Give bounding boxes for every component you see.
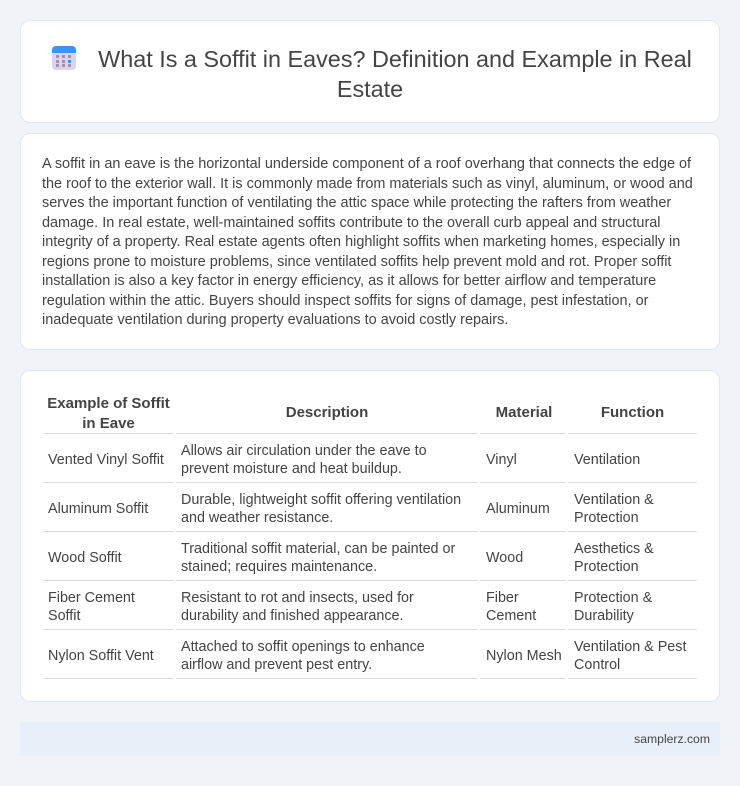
text block: definition paragraph bbox=[42, 156, 693, 328]
row: Vented Vinyl Soffit: Ventilation bbox=[574, 452, 640, 468]
row: Nylon Soffit Vent bbox=[48, 639, 686, 673]
row: Nylon Soffit Vent: Ventilation & Pest bbox=[574, 639, 686, 655]
row: Nylon Soffit Vent: airflow and prevent pest entry. bbox=[181, 657, 372, 673]
row: Fiber Cement Soffit: Durability bbox=[574, 608, 634, 624]
row: Wood Soffit: stained; requires maintenance. bbox=[181, 559, 377, 575]
row: Vented Vinyl Soffit bbox=[48, 443, 640, 477]
text block: definition paragraph: inadequate ventilation during property evaluations to avoid costly repairs. bbox=[42, 312, 508, 328]
row: Wood Soffit: Traditional soffit material, can be painted or bbox=[181, 541, 455, 557]
row: Vented Vinyl Soffit: prevent moisture and heat buildup. bbox=[181, 461, 402, 477]
row: Nylon Soffit Vent: Control bbox=[574, 657, 620, 673]
row: Fiber Cement Soffit: Fiber Cement bbox=[48, 590, 135, 606]
text block: definition paragraph: A soffit in an eave is the horizontal underside component of a roof overhang that connects the edge of bbox=[42, 156, 691, 172]
text block: definition paragraph: regulation within the attic. Buyers should inspect soffits for signs of damage, pest infestation, or bbox=[42, 292, 648, 308]
panel: table bbox=[20, 370, 720, 702]
row: Nylon Soffit Vent: Attached to soffit openings to enhance bbox=[181, 639, 425, 655]
row: Vented Vinyl Soffit: Vinyl bbox=[486, 452, 517, 468]
row: Nylon Soffit Vent: Nylon Soffit Vent bbox=[48, 648, 154, 664]
table header bbox=[47, 395, 664, 432]
title: What Is a Soffit in Eaves? Definition and Example in Real bbox=[98, 46, 692, 72]
row: Aluminum Soffit: and weather resistance. bbox=[181, 510, 333, 526]
footer bar bbox=[20, 722, 720, 756]
table header: Function bbox=[601, 404, 664, 421]
row: Aluminum Soffit: Aluminum bbox=[486, 501, 550, 517]
panel: title card bbox=[20, 20, 720, 123]
panel: definition bbox=[20, 133, 720, 350]
text block: definition paragraph: damage. In real estate, well-maintained soffits contribute to the overall curb appeal and structural bbox=[42, 214, 660, 230]
row: Nylon Soffit Vent: Nylon Mesh bbox=[486, 648, 562, 664]
row: Aluminum Soffit: Protection bbox=[574, 510, 639, 526]
row: Wood Soffit: Aesthetics & bbox=[574, 541, 654, 557]
table header: Example of Soffit bbox=[47, 395, 170, 412]
row: Fiber Cement Soffit bbox=[48, 590, 652, 624]
text block: definition paragraph: serves the important function of ventilating the attic space while protecting the rafters from weather bbox=[42, 195, 671, 211]
title: Estate bbox=[337, 76, 403, 102]
row: Fiber Cement Soffit: Resistant to rot and insects, used for bbox=[181, 590, 414, 606]
footer credit: samplerz.com bbox=[634, 732, 710, 746]
text block: definition paragraph: the roof to the exterior wall. It is commonly made from materials such as vinyl, aluminum, or wood and bbox=[42, 176, 693, 192]
row: Vented Vinyl Soffit: Allows air circulation under the eave to bbox=[181, 443, 427, 459]
text block: definition paragraph: regions prone to moisture problems, since ventilated soffits help prevent mold and rot. Proper soffit bbox=[42, 254, 671, 270]
row: Fiber Cement Soffit: Soffit bbox=[48, 608, 80, 624]
table header: Description bbox=[286, 404, 368, 421]
row: Wood Soffit: Wood Soffit bbox=[48, 550, 122, 566]
text block: definition paragraph: integrity of a property. Real estate agents often highlight soffits when marketing homes, especially in bbox=[42, 234, 680, 250]
icon: calendar bbox=[52, 46, 76, 70]
row: Aluminum Soffit: Aluminum Soffit bbox=[48, 501, 148, 517]
row: Fiber Cement Soffit: durability and finished appearance. bbox=[181, 608, 403, 624]
row: Wood Soffit bbox=[48, 541, 654, 575]
text block: definition paragraph: installation is also a key factor in energy efficiency, as it allows for better airflow and temperature bbox=[42, 273, 656, 289]
row: Fiber Cement Soffit: Cement bbox=[486, 608, 536, 624]
row: Vented Vinyl Soffit: Vented Vinyl Soffit bbox=[48, 452, 164, 468]
table header: in Eave bbox=[82, 415, 135, 432]
row: Wood Soffit: Protection bbox=[574, 559, 639, 575]
row: Aluminum Soffit: Durable, lightweight soffit offering ventilation bbox=[181, 492, 461, 508]
row: Aluminum Soffit bbox=[48, 492, 654, 526]
title bbox=[98, 46, 692, 102]
row: Fiber Cement Soffit: Fiber bbox=[486, 590, 519, 606]
row: Aluminum Soffit: Ventilation & bbox=[574, 492, 654, 508]
row: Fiber Cement Soffit: Protection & bbox=[574, 590, 652, 606]
row: Wood Soffit: Wood bbox=[486, 550, 523, 566]
table header: Material bbox=[496, 404, 552, 421]
